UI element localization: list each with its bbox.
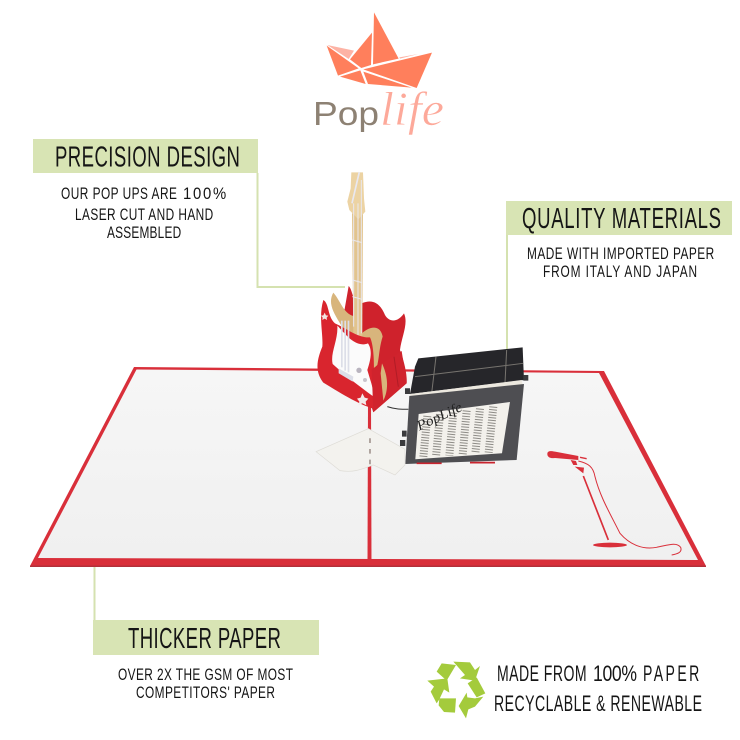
description (527, 245, 714, 282)
description: COMPETITORS' PAPER (136, 684, 275, 703)
amp side knobs (400, 375, 528, 446)
recycling statement: PAPER (643, 661, 699, 686)
panel: thicker paper (93, 620, 319, 703)
description: OUR POP UPS ARE (61, 185, 177, 204)
description: ASSEMBLED (107, 224, 181, 243)
pop-up: amplifier (400, 347, 528, 464)
recycling statement: MADE FROM (497, 661, 587, 686)
heading bar (33, 139, 258, 173)
logo wordmark: Pop: Pop (313, 95, 379, 132)
description: OVER 2X THE GSM OF MOST (118, 666, 293, 685)
amp top (410, 347, 524, 394)
logo: Poplife (313, 12, 444, 136)
heading: PRECISION DESIGN (55, 141, 240, 174)
heading: QUALITY MATERIALS (522, 203, 721, 235)
connector lines (94, 173, 507, 620)
description: 100% (183, 185, 226, 203)
description (61, 185, 226, 243)
heading bar (93, 620, 319, 655)
description: LASER CUT AND HAND (75, 206, 213, 225)
pop-up: white pick flap (316, 413, 405, 480)
icon: recycling symbol (427, 662, 485, 718)
back guitar body (343, 286, 407, 412)
panel: precision design (33, 139, 258, 243)
logo wordmark: life: life (380, 83, 444, 136)
strings and frets (352, 172, 362, 337)
recycling statement: RECYCLABLE & RENEWABLE (494, 691, 702, 716)
pop-up card base (30, 367, 706, 567)
description (118, 666, 293, 703)
speaker grille (415, 402, 510, 459)
amp front frame (405, 384, 524, 464)
headstock (347, 172, 365, 219)
heading: THICKER PAPER (128, 623, 281, 655)
front flap (372, 351, 407, 412)
front guitar body (317, 300, 377, 409)
neck (352, 213, 363, 338)
icon: microphone on stand (547, 451, 681, 555)
description: MADE WITH IMPORTED PAPER (527, 245, 714, 264)
gold middle layer (331, 293, 383, 372)
pickguard (332, 326, 373, 396)
heading bar (506, 201, 732, 235)
description: FROM ITALY AND JAPAN (543, 263, 697, 282)
stars (321, 313, 328, 320)
recycling statement (494, 661, 702, 716)
pickups and bridge (339, 321, 367, 382)
icon: origami boat (327, 12, 432, 88)
amp brand script: PopLife (414, 400, 465, 435)
recycling statement: 100% (593, 662, 637, 687)
pop-up: electric guitar (317, 172, 408, 412)
panel: quality materials (506, 201, 732, 282)
